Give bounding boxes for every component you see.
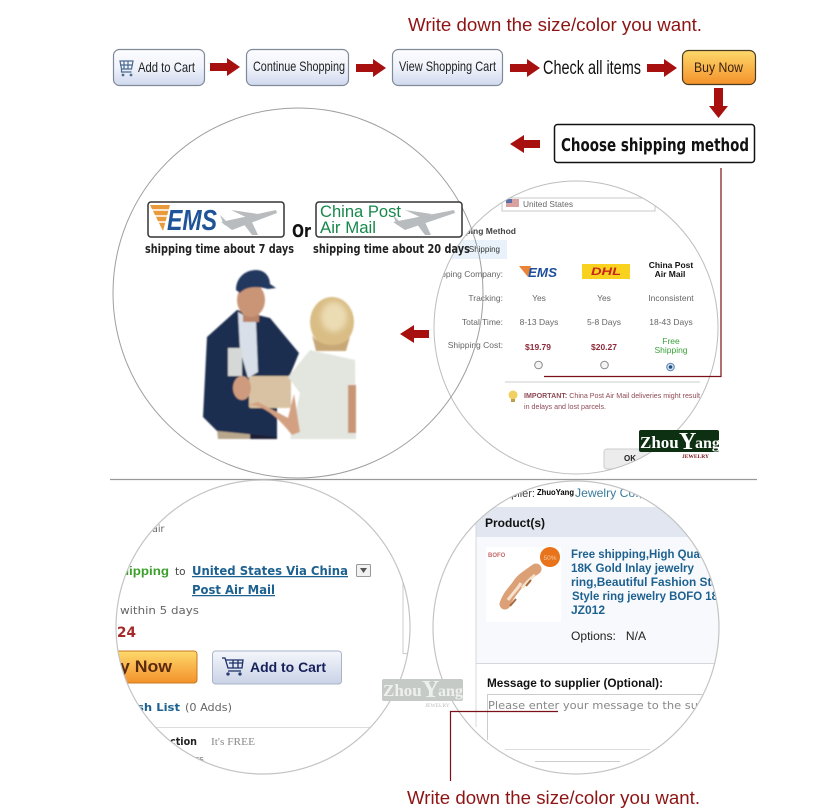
shipping comparison values: Yes	[597, 293, 611, 303]
label: China Post Air Mail	[649, 262, 694, 277]
panel: order message zoom circle	[433, 481, 726, 774]
step: continue shopping button: Continue Shopping	[253, 58, 345, 74]
logo box: China Post Air Mail	[316, 202, 462, 237]
logo box: EMS: EMS	[167, 205, 218, 237]
important notice	[508, 390, 701, 411]
arrow: left to delivery	[400, 325, 429, 343]
logo box: China Post Air Mail: China Post	[320, 202, 401, 221]
arrow: down to shipping method	[709, 88, 728, 118]
clipped text: air: air	[152, 524, 164, 535]
important notice: IMPORTANT: China Post Air Mail deliveries might result	[524, 391, 701, 400]
arrow: left from shipping method	[510, 135, 540, 153]
watermark logo: ZhouYang: ang	[695, 435, 720, 452]
buyer protection fragment	[170, 737, 254, 761]
shipping destination	[112, 563, 370, 597]
supplier line: Supplier:	[492, 488, 535, 500]
row labels: Total Time:	[462, 317, 503, 327]
wish list link: (0 Adds)	[185, 701, 232, 714]
step: buy now button: Buy Now	[694, 59, 744, 75]
hair highlight	[321, 302, 347, 332]
label: China Post Air Mail: Air Mail	[655, 269, 685, 279]
step: view shopping cart button: View Shopping Cart	[399, 58, 496, 74]
shipping destination: Shipping	[112, 564, 169, 578]
message heading: Message to supplier (Optional):	[487, 676, 663, 690]
buy now button	[118, 650, 198, 684]
table rules	[476, 524, 714, 727]
icon: cart	[120, 61, 133, 76]
wish list link: sh List	[137, 701, 180, 714]
step: add to cart button: Add to Cart	[138, 59, 195, 75]
label: China Post Air Mail: China Post	[649, 260, 693, 270]
step: buy now button	[682, 50, 756, 84]
arrow: to buy now	[647, 59, 677, 77]
product photo: gold ring	[488, 547, 560, 610]
product title link: JZ012	[571, 603, 605, 617]
wish list link	[139, 703, 231, 712]
joining word: Or: Or	[292, 221, 311, 242]
icon: airplane	[393, 210, 455, 235]
panel: delivery options zoom circle	[113, 108, 483, 478]
OK button: OK	[624, 454, 636, 463]
price fragment: 24	[117, 625, 136, 641]
panel: product page zoom circle	[100, 480, 412, 774]
country selector	[502, 198, 655, 211]
watermark logo: faded ZhouYang: Zhou	[383, 681, 422, 700]
row labels: Shipping Company:	[429, 269, 503, 279]
logo box: China Post Air Mail: Air Mail	[320, 218, 376, 237]
watermark logo: faded ZhouYang: ang	[438, 683, 463, 700]
caption: EMS shipping time: shipping time about 7 days	[145, 241, 294, 256]
product table body	[476, 537, 726, 663]
product photo: gold ring: 50%	[543, 555, 557, 562]
OK button	[604, 449, 654, 469]
panel edge	[402, 583, 407, 654]
product title link: 18K Gold Inlay jewelry	[571, 561, 694, 575]
product title link	[571, 547, 718, 617]
shipping destination: United States Via China	[192, 563, 348, 578]
message textarea	[488, 694, 705, 762]
arrow: to check all items	[510, 59, 540, 77]
product title link: ring,Beautiful Fashion Sta	[571, 575, 718, 589]
step: add to cart button	[114, 50, 204, 86]
shipping comparison values: 8-13 Days	[520, 317, 558, 327]
delivery estimate: ct within 5 days	[105, 604, 199, 617]
buyer protection fragment: ers	[190, 755, 204, 765]
shipping comparison values: $20.27	[591, 342, 617, 352]
shipping comparison values: $19.79	[525, 342, 551, 352]
supplier line: ZhuoYang	[537, 488, 574, 497]
arrow: to continue shopping	[210, 58, 240, 76]
watermark logo: faded ZhouYang: Y	[422, 677, 439, 703]
watermark logo: ZhouYang	[639, 429, 720, 460]
step: continue shopping button	[246, 50, 348, 86]
buyer protection fragment: It's FREE	[211, 736, 255, 748]
shipping method heading: Shipping Method	[447, 226, 516, 236]
watermark logo: faded ZhouYang: JEWELRY	[425, 703, 450, 709]
top instruction heading: Write down the size/color you want.	[408, 15, 702, 35]
shipping comparison values: 18-43 Days	[649, 317, 693, 327]
step: choose shipping method box: Choose shipping method	[561, 135, 749, 156]
watermark logo: ZhouYang: JEWELRY	[682, 454, 709, 460]
free shipping tab	[451, 240, 507, 259]
add to cart button	[212, 651, 342, 684]
row labels: Shipping Cost:	[448, 340, 503, 350]
product title link: Style ring jewelry BOFO 18	[572, 589, 718, 603]
product header band: Product(s)	[485, 516, 545, 530]
row labels	[443, 271, 502, 350]
shipping comparison values	[520, 295, 694, 354]
row labels: Tracking:	[468, 293, 503, 303]
caption: China Post shipping time: shipping time about 20 days	[313, 241, 470, 256]
logo: small EMS: EMS	[528, 265, 557, 280]
supplier line	[512, 488, 641, 500]
step: check all items: Check all items	[543, 58, 641, 79]
watermark logo: ZhouYang: Y	[679, 429, 696, 455]
buyer protection fragment: ction	[170, 735, 197, 748]
shipping comparison values: 5-8 Days	[587, 317, 621, 327]
shipping destination: Post Air Mail	[192, 582, 275, 597]
icon: airplane	[220, 210, 277, 235]
product header band	[476, 507, 688, 537]
logo: DHL: DHL	[591, 266, 621, 278]
radio options	[535, 361, 674, 371]
divider between sections	[110, 478, 757, 480]
buy now button: y Now	[120, 657, 173, 676]
free shipping tab: Shipping	[469, 245, 500, 254]
connector line: shipping box to selected option	[544, 168, 721, 376]
connector line: message box to bottom note	[450, 712, 558, 781]
logo: DHL	[582, 264, 630, 279]
section rule	[156, 727, 370, 728]
illustration: courier delivering parcel to customer	[203, 270, 356, 439]
logo: small EMS	[519, 266, 557, 277]
logo box: EMS	[148, 202, 284, 237]
shipping comparison values: 18-43	[723, 317, 745, 327]
panel: shipping method selection zoom circle	[429, 181, 745, 474]
step: choose shipping method box	[554, 124, 754, 162]
divider	[505, 382, 700, 383]
shipping comparison values: Shipping	[654, 345, 688, 355]
infographic canvas	[110, 18, 757, 808]
shipping comparison values: Free	[662, 336, 680, 346]
country selector: United States	[523, 199, 573, 209]
product photo: gold ring: BOFO	[488, 553, 506, 559]
watermark logo: ZhouYang: Zhou	[640, 433, 679, 452]
arrow: to view shopping cart	[356, 59, 386, 77]
add to cart button: Add to Cart	[250, 659, 326, 675]
important notice: in delays and lost parcels.	[524, 402, 606, 411]
shipping destination: to	[175, 566, 186, 578]
step: view shopping cart button	[392, 50, 502, 86]
shipping comparison values: Inconsistent	[648, 293, 694, 303]
product options: Options: N/A	[571, 629, 646, 643]
product title link: Free shipping,High Qua.	[571, 547, 703, 561]
supplier line: Jewelry Co.,	[575, 486, 642, 500]
message textarea: Please enter your message to the su	[488, 700, 698, 712]
watermark logo: faded ZhouYang	[382, 677, 463, 709]
shipping comparison values: Yes	[532, 293, 546, 303]
icon: cart	[222, 658, 243, 675]
bottom instruction note: Write down the size/color you want.	[407, 788, 700, 808]
